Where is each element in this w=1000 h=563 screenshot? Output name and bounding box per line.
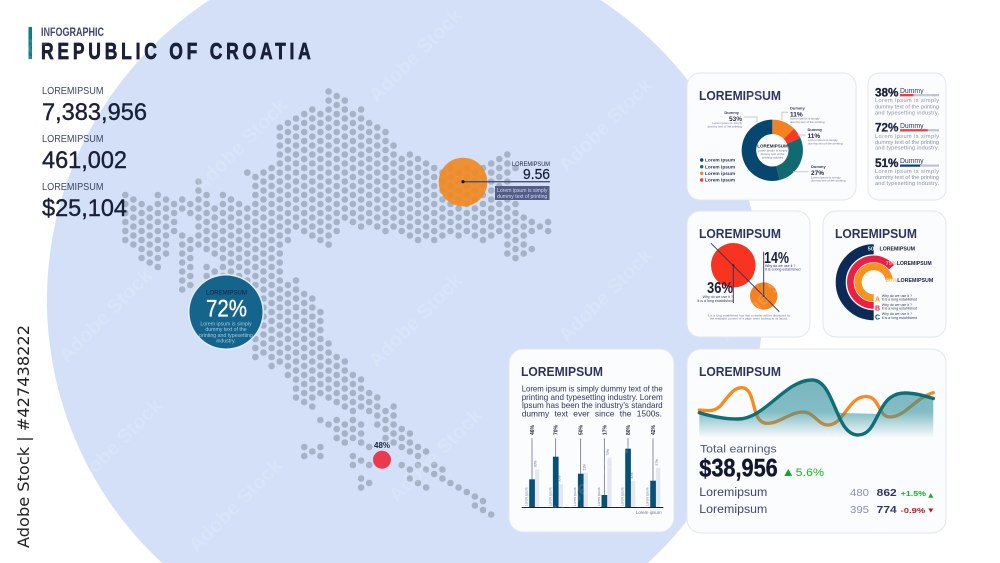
marker: orange region with callout: dummy text of printing [497, 194, 547, 200]
bar value labels: 46% [530, 424, 536, 435]
radial labels: LOREMIPSUM [880, 247, 915, 253]
red and orange circles [711, 243, 779, 312]
radial legend: C [875, 314, 880, 322]
stock watermarks: Adobe Stock [365, 4, 467, 107]
paragraph: Ipsum has been the industry's standard [522, 400, 663, 410]
title block: REPUBLIC OF CROATIA [41, 40, 311, 65]
item 72%: Lorem ipsum is simply [875, 134, 939, 140]
stock watermarks: Adobe Stock [55, 264, 157, 367]
panel: donut chart [687, 73, 856, 200]
radial labels: LOREMIPSUM [897, 278, 934, 284]
radial legend: It is a long established [882, 316, 917, 320]
small rotated labels: Lorem ipsum [597, 487, 601, 506]
panel: radial bars [823, 211, 946, 337]
radial legend: It is a long established [882, 297, 917, 301]
stock watermarks: Adobe Stock [715, 244, 817, 347]
small rotated labels: 60% [534, 460, 538, 467]
stat: 461,002: LOREMIPSUM [42, 134, 104, 145]
donut label 53% [707, 110, 757, 128]
panel: circle comparison [687, 211, 810, 337]
panel: bar chart [509, 349, 674, 532]
donut label 53%: Dummy [724, 110, 740, 115]
stock watermarks: Adobe Stock [885, 234, 987, 337]
label 14%: It is a long established [765, 268, 801, 272]
donut legend: Lorem ipsum [705, 171, 735, 177]
total earnings: $38,956 [699, 454, 778, 482]
small rotated labels: Lorem ipsum [548, 487, 552, 506]
row 2 [699, 504, 933, 516]
bar value labels: 42% [651, 424, 657, 435]
small rotated labels: 51% [582, 464, 586, 470]
bar value labels: 70% [554, 424, 560, 435]
panel: radial bars: LOREMIPSUM [835, 227, 917, 241]
stat: 7,383,956 [42, 86, 147, 126]
radial legend: Why do we use it ? [882, 303, 912, 307]
stock watermarks: Adobe Stock [865, 54, 967, 157]
radial legend: It is a long established [882, 307, 917, 311]
donut centre text: LOREMIPSUM [757, 144, 788, 149]
label 14% [764, 250, 801, 272]
title block [28, 27, 311, 65]
label 14%: 14% [764, 250, 789, 267]
radial labels: 80% [886, 278, 898, 284]
marker: red region 48% [373, 441, 391, 469]
paragraph: Lorem ipsum is simply dummy text of the [522, 384, 663, 394]
panel: donut chart: LOREMIPSUM [699, 89, 781, 103]
stat: $25,104: $25,104 [42, 195, 127, 222]
item 72%: dummy text of the printing [875, 140, 939, 146]
caption: It is a long established fact that a reader will be distracted by [708, 314, 791, 318]
axis caption: Lorem ipsum [636, 510, 662, 515]
donut centre text: dummy text of the [761, 152, 785, 156]
item 72% [875, 121, 939, 152]
item 51%: Dummy [900, 156, 924, 165]
total earnings: 5.6% [796, 467, 824, 479]
label 14%: Why do we use it ? [765, 264, 795, 268]
row 1: Loremipsum [699, 487, 767, 499]
paragraph: dummy text ever since the 1500s. [522, 408, 662, 418]
item 51%: 51% [875, 156, 899, 170]
bars [522, 438, 663, 508]
donut label 53%: Lorem ipsum is simply [712, 121, 742, 125]
row 1 [699, 487, 933, 499]
small rotated labels: 57% [655, 459, 659, 466]
donut legend: Lorem ipsum [705, 158, 735, 164]
donut chart [749, 127, 796, 174]
bar value labels: 50% [579, 424, 585, 435]
row 2: -0.9% [901, 506, 926, 515]
background circle [47, 0, 763, 563]
caption: the readable content of a page when looking at its layout. [710, 317, 788, 321]
donut label 11% red: Dummy [808, 127, 823, 132]
donut label 27%: dummy text of the printing [811, 179, 846, 183]
marker: teal region 72%: printing and typesetting [199, 333, 253, 339]
label 36% [697, 280, 733, 303]
marker: teal region 72%: industry. [216, 338, 236, 344]
donut label 53%: dummy text of the printing [707, 124, 742, 128]
bar value labels: 80% [626, 424, 632, 435]
marker: red region 48%: 48% [374, 441, 390, 450]
stock watermarks: Adobe Stock [555, 244, 657, 347]
donut label 11% orange: Lorem ipsum is simply [790, 116, 820, 120]
stock watermarks: Adobe Stock [365, 269, 467, 372]
paragraph: printing and typesetting industry. Lorem [522, 392, 663, 402]
radial legend: Why do we use it ? [882, 312, 912, 316]
radial legend: Why do we use it ? [882, 294, 912, 298]
panel: bar chart: LOREMIPSUM [521, 365, 603, 379]
item 51%: and typesetting industry. [875, 181, 939, 187]
marker: orange region with callout: Lorem ipsum is simply [497, 188, 548, 194]
item 38%: Dummy [900, 86, 924, 95]
label 36%: Why do we use it ? [703, 295, 733, 299]
vertical stock id: Adobe Stock | #427438222 [14, 325, 33, 548]
item 72%: Dummy [900, 121, 924, 130]
radial chart [841, 249, 892, 315]
total earnings [699, 444, 824, 482]
marker: orange region with callout [439, 158, 550, 206]
marker: orange region with callout: 9.56 [523, 167, 550, 183]
panel: circle comparison: LOREMIPSUM [699, 227, 781, 241]
row 2: Loremipsum [699, 504, 767, 516]
stock watermarks: Adobe Stock [65, 394, 167, 497]
donut label 11% red: 11% [808, 133, 820, 140]
donut label 27%: Dummy [811, 164, 826, 169]
donut legend [700, 158, 735, 184]
panel: earnings line chart: LOREMIPSUM [699, 365, 781, 379]
radial labels: LOREMIPSUM [897, 261, 932, 267]
label 36%: 36% [707, 280, 733, 297]
stock watermarks: Adobe Stock [555, 74, 657, 177]
row 1: 480 [850, 487, 869, 499]
stock watermarks: Adobe Stock [865, 444, 967, 547]
total earnings: Total earnings [700, 444, 777, 456]
donut label 11% red [798, 127, 843, 146]
stat: 461,002 [42, 134, 127, 174]
marker: orange region with callout: LOREMIPSUM [512, 161, 550, 168]
marker: teal region 72%: Lorem ipsum is simply [200, 322, 252, 328]
small rotated labels: 30% [558, 475, 562, 482]
donut label 27%: 27% [811, 170, 824, 177]
stock watermarks: Adobe Stock [190, 94, 292, 197]
item 38%: 38% [875, 86, 899, 100]
item 72%: 72% [875, 121, 899, 135]
item 51%: dummy text of the printing [875, 175, 939, 181]
panel: earnings line chart [687, 349, 946, 533]
small rotated labels: 75% [606, 449, 610, 456]
row 2: 395 [850, 504, 869, 516]
radial labels: 75% [886, 261, 897, 267]
donut label 27%: Lorem ipsum is simply [811, 175, 841, 179]
donut label 53%: 53% [729, 116, 742, 123]
stock watermarks: Adobe Stock [745, 424, 847, 527]
donut label 11% orange: dummy text of the printing [790, 120, 825, 124]
marker: teal region 72%: dummy text of the [205, 327, 247, 333]
item 38%: Lorem ipsum is simply [875, 98, 939, 104]
item 51%: Lorem ipsum is simply [875, 169, 939, 175]
radial legend: B [875, 306, 880, 312]
donut centre text [757, 144, 788, 159]
title block: INFOGRAPHIC [41, 27, 104, 39]
donut legend: Lorem ipsum [705, 164, 735, 170]
radial legend: A [875, 296, 880, 304]
small rotated labels: Lorem ipsum [646, 487, 650, 506]
donut legend: Lorem ipsum [705, 178, 735, 184]
row 1: 862 [877, 487, 897, 499]
bar value labels [530, 424, 657, 435]
marker: teal region 72%: LOREMIPSUM [206, 290, 247, 296]
stat: 7,383,956: 7,383,956 [42, 99, 147, 126]
row 2: 774 [877, 504, 897, 516]
stat: $25,104: LOREMIPSUM [42, 182, 104, 193]
item 38%: dummy text of the printing [875, 105, 939, 111]
stock watermarks: Adobe Stock [185, 454, 287, 557]
donut label 11% red: Lorem ipsum is simply [808, 138, 838, 142]
radial legend [875, 294, 917, 322]
radial labels [868, 247, 934, 284]
paragraph [522, 384, 663, 418]
donut label 11% red: dummy text of the printing [808, 142, 843, 146]
item 38% [875, 86, 939, 117]
row 1: +1.5% [901, 489, 926, 498]
small rotated labels [524, 449, 659, 506]
map of Croatia: dot grid [125, 92, 548, 515]
small rotated labels: Lorem ipsum [524, 487, 528, 506]
donut centre text: printing industry [762, 155, 784, 159]
donut centre text: Lorem ipsum is simply [758, 149, 788, 153]
stat: 461,002: 461,002 [42, 147, 127, 174]
item 38%: and typesetting industry. [875, 111, 939, 117]
stock watermarks: Adobe Stock [385, 404, 487, 507]
small rotated labels: 30% [630, 472, 634, 479]
line chart [699, 380, 933, 438]
donut label 27% [793, 164, 846, 183]
item 51% [875, 156, 939, 187]
panel: percentage progress list [868, 73, 946, 200]
donut label 11% orange: 11% [790, 111, 803, 118]
stock watermarks: Adobe Stock [715, 34, 817, 137]
marker: teal region 72% [188, 274, 264, 350]
small rotated labels: Lorem ipsum [620, 487, 624, 506]
stat: $25,104 [42, 182, 127, 222]
marker: teal region 72%: 72% [206, 296, 247, 322]
small rotated labels: Lorem ipsum [573, 487, 577, 506]
donut label 11% orange [782, 106, 825, 124]
bar value labels: 17% [602, 424, 608, 435]
label 36%: It is a long established [697, 299, 733, 303]
stock watermarks: Adobe Stock [535, 434, 637, 537]
stock watermarks: Adobe [11, 11, 71, 71]
caption [708, 314, 791, 321]
stat: 7,383,956: LOREMIPSUM [42, 86, 104, 97]
radial labels: 50% [868, 247, 880, 253]
item 72%: and typesetting industry. [875, 146, 939, 152]
donut label 11% orange: Dummy [790, 106, 805, 111]
